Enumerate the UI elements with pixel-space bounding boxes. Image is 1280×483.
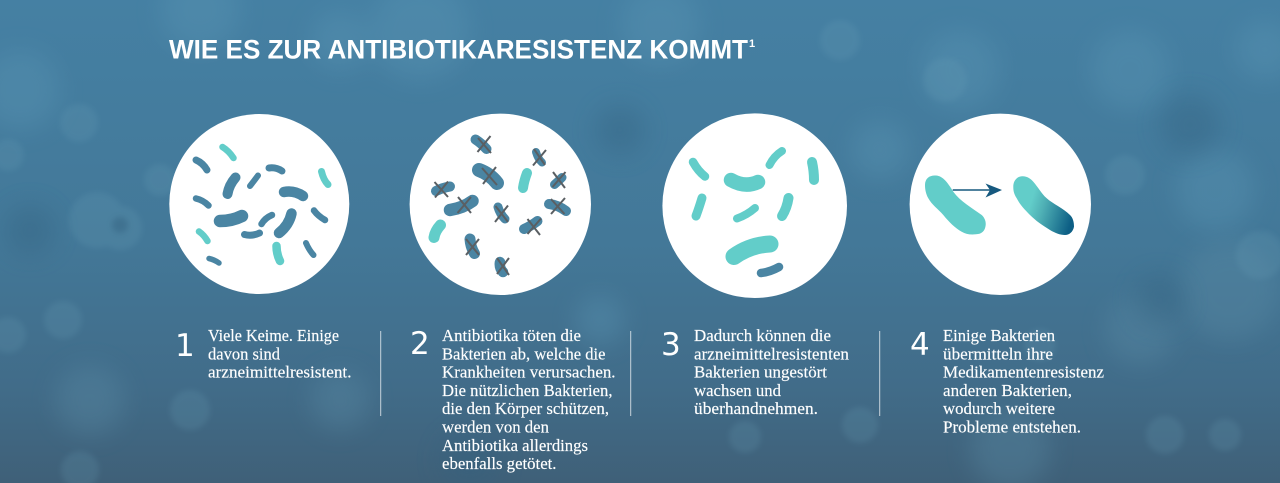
step 3 text: Bakterien ungestört [694, 363, 827, 382]
step 1 text: davon sind [208, 344, 281, 363]
circle 1 [169, 114, 349, 294]
panel 1: many germs [169, 114, 349, 294]
panel 4: resistance transfer [910, 114, 1091, 295]
step 2 text: Bakterien ab, welche die [442, 344, 606, 363]
step 4 text: wodurch weitere [943, 399, 1055, 418]
cross marks [434, 136, 566, 275]
step 1 text: arzneimittelresistent. [208, 363, 352, 382]
resistant bacteria [199, 147, 328, 261]
circle 3 [662, 113, 847, 298]
surviving resistant bacteria [434, 173, 527, 238]
step 2 text: 2 [410, 326, 430, 362]
step 2 text: Antibiotika töten die [442, 326, 581, 345]
step 4 text: anderen Bakterien, [943, 381, 1072, 400]
bacterium right [1013, 176, 1074, 235]
step 2 text: Die nützlichen Bakterien, [442, 381, 612, 400]
arrow [953, 184, 1002, 198]
step 1 text [175, 326, 352, 382]
step 1 text: 1 [175, 328, 195, 364]
step 3 text: wachsen und [694, 381, 782, 400]
step 3 text: überhandnehmen. [694, 399, 818, 418]
step 2 text: ebenfalls getötet. [442, 454, 556, 473]
bacterium left [925, 175, 986, 235]
step 2 text [410, 326, 616, 473]
sensitive bacteria [196, 160, 325, 263]
title: 1 [749, 38, 755, 50]
circle 2 [410, 114, 591, 295]
panel 2: antibiotics kill bacteria [410, 114, 591, 295]
resistant bacteria [693, 151, 814, 256]
step 1 text: Viele Keime. Einige [208, 326, 339, 345]
step 2 text: die den Körper schützen, [442, 399, 609, 418]
step 3 text [661, 326, 849, 418]
step 3 text: Dadurch können die [694, 326, 831, 345]
step 3 text: arzneimittelresistenten [694, 344, 849, 363]
step 2 text: Antibiotika allerdings [442, 436, 588, 455]
step 4 text: Medikamentenresistenz [943, 363, 1104, 382]
step 4 text [910, 326, 1104, 436]
step 4 text: Probleme entstehen. [943, 418, 1081, 436]
title: WIE ES ZUR ANTIBIOTIKARESISTENZ KOMMT [169, 34, 748, 64]
remaining dark bacterium [761, 267, 779, 273]
panel 3: resistant bacteria grow [662, 113, 847, 298]
step 2 text: werden von den [442, 418, 549, 436]
step 3 text: 3 [661, 327, 681, 363]
step 4 text: übermitteln ihre [943, 344, 1053, 363]
step 4 text: Einige Bakterien [943, 326, 1055, 345]
circle 4 [910, 114, 1091, 295]
step 4 text: 4 [910, 327, 930, 363]
step 2 text: Krankheiten verursachen. [442, 363, 616, 382]
killed bacteria [436, 140, 566, 272]
